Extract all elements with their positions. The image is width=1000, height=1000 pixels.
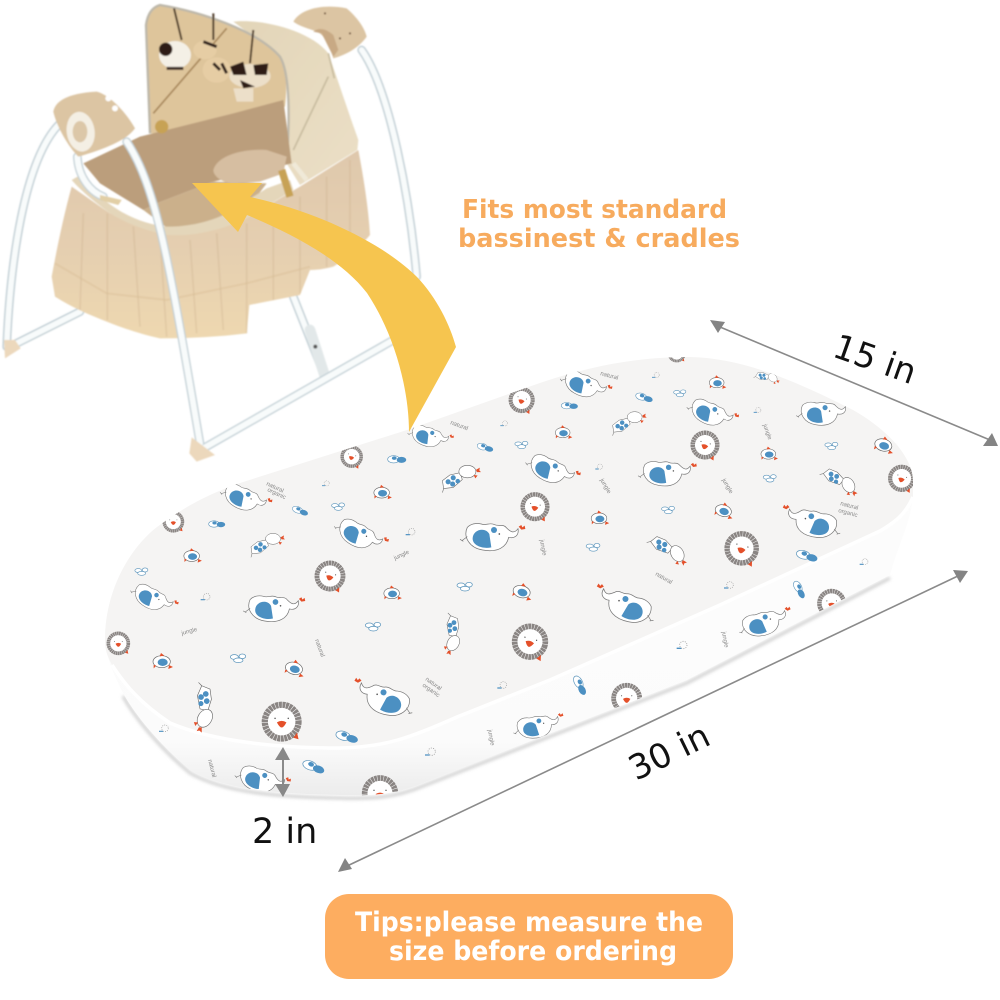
label: 15 in: 15 in	[828, 327, 922, 393]
animal print	[108, 346, 916, 809]
tips banner: size before ordering	[389, 936, 677, 967]
animal print: natural	[839, 501, 859, 512]
frame feet	[4, 340, 215, 462]
animal print: natural	[599, 371, 619, 382]
bassinet rear frame tubes	[7, 50, 417, 377]
animal print: jungle	[720, 630, 729, 649]
bassinet inner back panel	[147, 5, 286, 133]
animal print: jungle	[392, 549, 411, 562]
animal print: jungle	[538, 538, 547, 557]
mattress	[105, 346, 916, 809]
animal print: natural	[265, 481, 284, 495]
hanging toys	[159, 8, 271, 102]
bassinet canopy	[233, 21, 358, 185]
fits callout: Fits most standard	[462, 195, 727, 225]
animal print: jungle	[720, 477, 734, 495]
animal print: natural	[449, 420, 469, 432]
mattress top face	[105, 357, 913, 748]
animal print: jungle	[486, 728, 495, 747]
right control pod	[293, 7, 367, 58]
animal print: jungle	[761, 423, 772, 441]
mattress side wall	[105, 443, 913, 795]
curved yellow arrow	[192, 183, 456, 432]
fits callout	[458, 195, 740, 254]
bassinet photo	[4, 5, 417, 462]
bassinet interior bed	[72, 28, 307, 235]
bassinet skirt	[52, 150, 370, 338]
animal print: natural	[206, 759, 217, 778]
animal print: jungle	[180, 627, 199, 637]
tips banner	[325, 894, 733, 979]
animal print: natural	[313, 639, 325, 658]
left control pod	[53, 92, 135, 157]
dimension arrow: 30 in	[338, 570, 968, 872]
bassinet front frame tube	[77, 142, 393, 448]
animal print: jungle	[598, 477, 612, 495]
animal print: organic	[266, 487, 287, 501]
dimension arrow: 15 in	[710, 320, 998, 446]
tips banner: Tips:please measure the	[355, 907, 703, 938]
animal print: organic	[421, 683, 440, 699]
label: 30 in: 30 in	[622, 716, 716, 789]
dimension arrow: 2 in	[275, 747, 290, 797]
fits callout: bassinest & cradles	[458, 224, 740, 254]
mattress drop shadow	[123, 578, 890, 798]
canopy arch trim	[146, 5, 289, 163]
animal print: natural	[654, 572, 673, 586]
label: 2 in: 2 in	[252, 812, 317, 852]
mattress seam highlight	[112, 497, 913, 748]
animal print: natural	[424, 677, 442, 692]
animal print: organic	[837, 508, 858, 519]
